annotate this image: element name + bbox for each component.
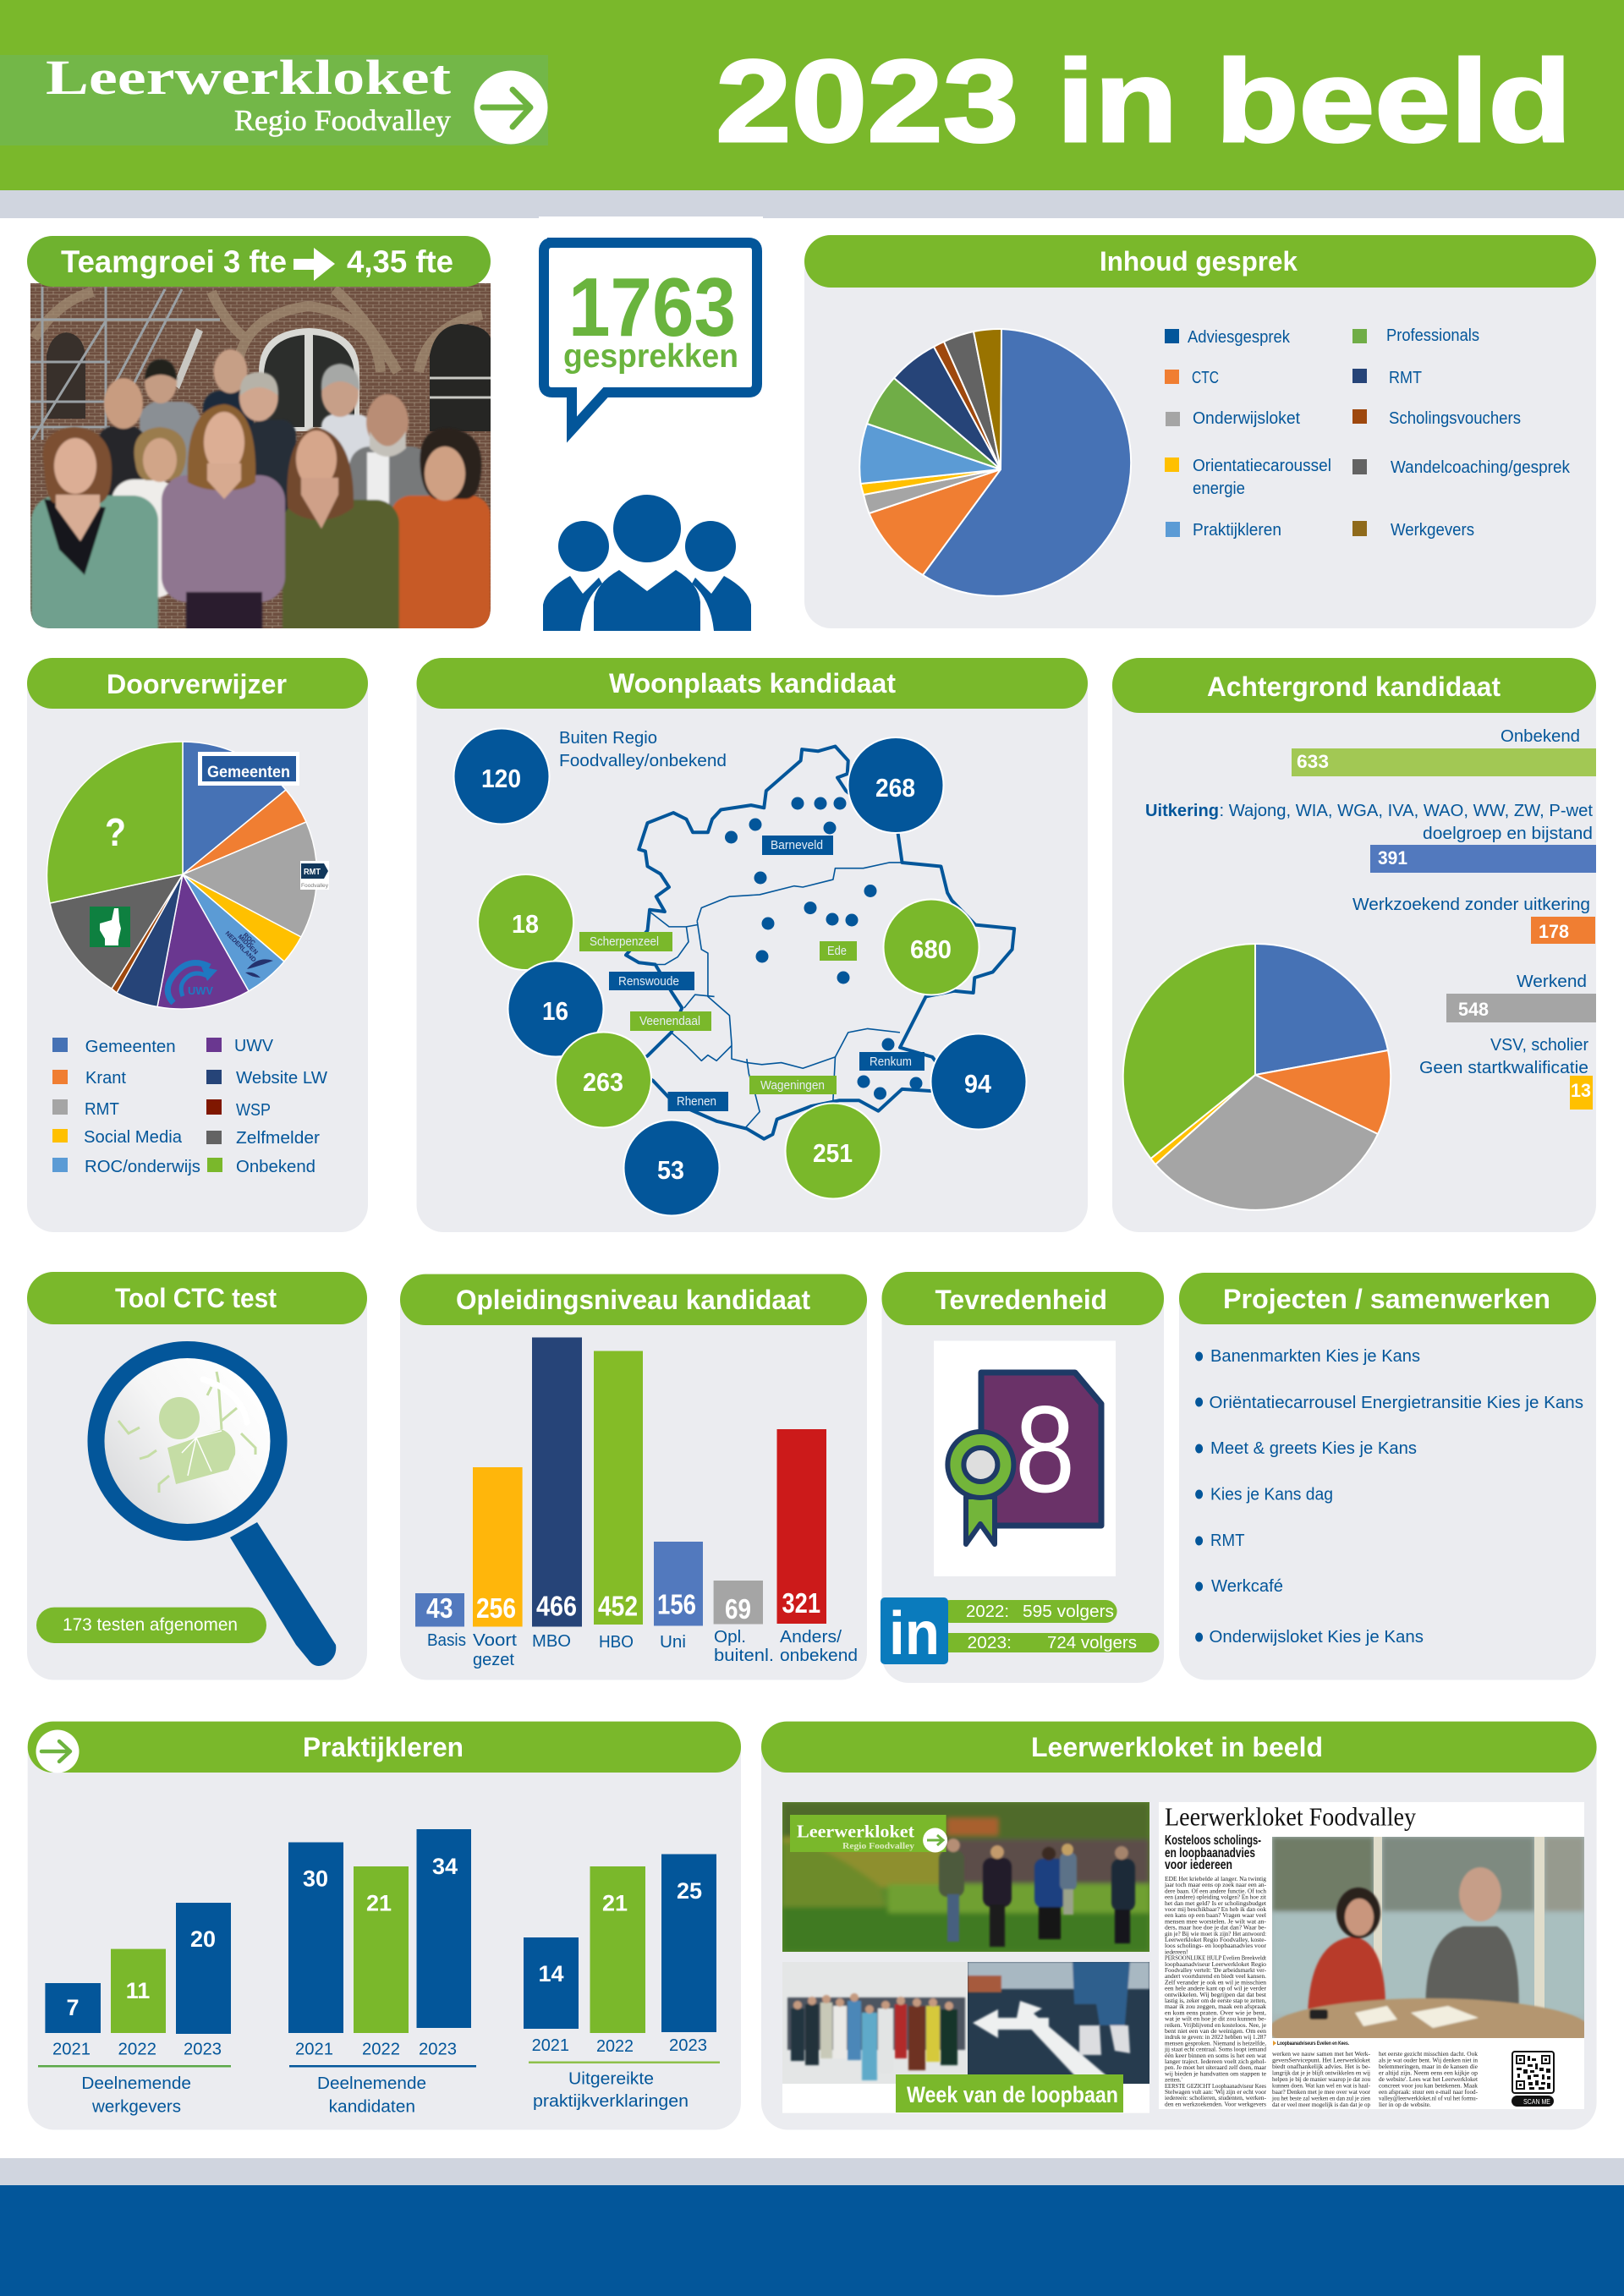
- article text column 1: maar ik zou zeggen, maak een afspraak: [1165, 2003, 1266, 2010]
- qr code: [1512, 2052, 1554, 2093]
- photo: beroepen groep: [782, 1962, 968, 2084]
- bubble values: 18: [512, 909, 539, 939]
- bar: werkend: 548: [1458, 999, 1489, 1020]
- article caption: Loopbaanadviseurs Evelien en Kees.: [1277, 2041, 1349, 2047]
- bar: onbekend: Onbekend: [1501, 727, 1580, 746]
- bar chart: deelnemende werkgevers: 2021: [52, 2041, 91, 2059]
- legend: doorverwijzer: ROC/onderwijs: [85, 1158, 200, 1176]
- bubble values: 53: [657, 1155, 684, 1185]
- heading: [1112, 658, 1596, 713]
- article text column 1: mensen gesproken. Niemand is hetzelfde,: [1165, 2039, 1266, 2047]
- article text column 1: Foodvalley vertelt: 'De arbeidsmarkt ver-: [1165, 1966, 1267, 1974]
- article subtitle: [1165, 1833, 1261, 1872]
- bar chart: deelnemende kandidaten: 2022: [362, 2041, 400, 2059]
- article text column 2: baar? Denken met je mee over wat voor: [1272, 2088, 1371, 2096]
- photo: groep in het veld: [782, 1802, 1149, 1952]
- place labels: Ede: [827, 944, 847, 958]
- pie label: Gemeenten: [198, 752, 299, 786]
- article text column 2: helpen je bij de manier waarop je dat zou: [1272, 2075, 1370, 2083]
- legend: inhoud gesprek: energie: [1193, 479, 1245, 498]
- bar chart: deelnemende kandidaten: 21: [366, 1891, 392, 1916]
- panel: projecten samenwerken: [1179, 1273, 1596, 1680]
- heading: Teamgroei: Teamgroei 3 fte: [61, 244, 287, 279]
- pie label: RMT logo: RMT: [304, 868, 321, 877]
- pie label: Gemeenten: Gemeenten: [207, 764, 290, 781]
- article text column 1: den en werkzoekenden. Voor werkgevers: [1165, 2100, 1266, 2107]
- article text column 1: een hele andere kant op of wil je verder: [1165, 1985, 1267, 1992]
- bar chart: opleidingsniveau: 256: [476, 1592, 516, 1624]
- article text column 1: reiken. Vrijblijvend en kosteloos. Nee, je: [1165, 2021, 1267, 2029]
- pie chart: inhoud gesprek: [859, 329, 1131, 596]
- article text column 1: loopbaanadviseur Leerwerkloket Regio: [1165, 1960, 1266, 1968]
- bubble values: 94: [964, 1069, 992, 1099]
- heading: [27, 1272, 367, 1324]
- article text column 1: mensen mee worstelen. Je wilt wat an-: [1165, 1917, 1267, 1925]
- front row: [112, 479, 178, 598]
- article text column 1: andert voortdurend en biedt veel kansen.: [1165, 1972, 1266, 1980]
- bullet list: Banenmarkten Kies je Kans: [1210, 1347, 1420, 1366]
- pill: 173 testen afgenomen: 173 testen afgenomen: [63, 1615, 238, 1635]
- article text column 3: de website'. Lees wat het Leerwerkloket: [1379, 2075, 1479, 2083]
- icon: rapportcijfer 8: 8: [1015, 1380, 1075, 1518]
- legend: inhoud gesprek: Adviesgesprek: [1188, 328, 1291, 347]
- pie chart: achtergrond: [1123, 944, 1391, 1210]
- article text column 2: geversServicepunt. Het Leerwerkloket: [1272, 2057, 1371, 2063]
- icon: hand: [90, 907, 130, 947]
- article text column 1: en kom eens praten. Over wie je bent,: [1165, 2008, 1266, 2016]
- bar chart: deelnemende werkgevers: 20: [190, 1926, 216, 1952]
- panel: tool ctc test: [27, 1272, 367, 1680]
- heading: Achtergrond kandidaat: [1207, 671, 1501, 702]
- legend: doorverwijzer: Social Media: [84, 1128, 183, 1147]
- bubble values: 268: [875, 773, 915, 803]
- scan me pill: SCAN ME: [1523, 2098, 1550, 2106]
- bar: uitkering: : Wajong, WIA, WGA, IVA, WAO, WW, ZW, P-wet: [1220, 802, 1593, 820]
- legend: inhoud gesprek: Orientatiecaroussel: [1193, 457, 1331, 475]
- icon: linkedin: in: [889, 1600, 940, 1668]
- bar chart: deelnemende kandidaten: 2021: [295, 2041, 333, 2059]
- logo overlay: Regio Foodvalley: [842, 1841, 915, 1851]
- icon: people: [543, 495, 751, 631]
- article text column 1: Zelf verander je ook en wil je misschien: [1165, 1978, 1266, 1986]
- bar chart: deelnemende werkgevers: werkgevers: [91, 2098, 181, 2117]
- legend: doorverwijzer: WSP: [236, 1101, 271, 1120]
- bullet list: Kies je Kans dag: [1210, 1486, 1333, 1504]
- bar chart: opleidingsniveau: Voort: [473, 1631, 517, 1650]
- pie chart: doorverwijzer: [47, 742, 317, 1009]
- bar: vsv scholier: Geen startkwalificatie: [1419, 1059, 1588, 1077]
- article text column 1: Leerwerkloket Regio Foodvalley, koste-: [1165, 1936, 1267, 1943]
- bar chart: deelnemende werkgevers: 11: [126, 1978, 150, 2003]
- heading: Praktijkleren: [303, 1732, 464, 1762]
- heading: [27, 658, 368, 709]
- article text column 2: [1271, 2050, 1371, 2108]
- bar chart: uitgereikte praktijkverklaringen: 21: [602, 1891, 628, 1916]
- article text column 1: voor mij beschikbaar? En heb ik dan ook: [1165, 1905, 1266, 1913]
- article text column 2: jou het beste zal werken en dan zul je zien: [1271, 2094, 1370, 2102]
- band under photos: [782, 2084, 1149, 2113]
- article subtitle: voor iedereen: [1165, 1858, 1232, 1872]
- article text column 1: lastig is, zeker om de eerste stap te zetten,: [1165, 1997, 1266, 2004]
- article text column 1: indruk te geven: in 2022 hebben wij 1.287: [1165, 2033, 1266, 2041]
- bar: uitkering: 391: [1378, 847, 1407, 869]
- panel: leerwerkloket in beeld: [761, 1722, 1597, 2129]
- heading: [881, 1272, 1164, 1325]
- article text column 3: belemmeringen, maar in de kansen die: [1379, 2063, 1479, 2070]
- note: buiten regio: Foodvalley/onbekend: [559, 752, 727, 770]
- article text column 1: EDE Het kriebelde al langer. Na twintig: [1165, 1875, 1266, 1882]
- article text column 1: het dan met geld? Is er scholingsbudget: [1165, 1899, 1267, 1907]
- label: Week van de loopbaan: Week van de loopbaan: [907, 2082, 1118, 2107]
- article text column 3: er altijd zijn. Neem eens een kijkje op: [1379, 2069, 1478, 2077]
- legend: doorverwijzer: Onbekend: [236, 1158, 315, 1176]
- legend: inhoud gesprek: Praktijkleren: [1193, 521, 1281, 540]
- logo: UWV: [167, 963, 217, 1003]
- icon: magnifier: [96, 1350, 336, 1666]
- article text column 1: een (andere) opleiding volgen? En hoe zit: [1165, 1893, 1267, 1901]
- bullet list: Oriëntatiecarrousel Energietransitie Kies je Kans: [1210, 1394, 1583, 1412]
- bar: vsv scholier: VSV, scholier: [1490, 1036, 1588, 1055]
- bar chart: uitgereikte praktijkverklaringen: praktijkverklaringen: [533, 2092, 689, 2111]
- bar chart: opleidingsniveau: HBO: [599, 1633, 634, 1652]
- article text column 1: EERSTE GEZICHT Loopbaanadviseur Kees: [1165, 2082, 1266, 2090]
- bubble values: 680: [910, 934, 952, 964]
- logo: ROC Midden Nederland: NEDERLAND: [224, 929, 258, 964]
- bar chart: uitgereikte praktijkverklaringen: 2022: [596, 2037, 634, 2056]
- bar chart: uitgereikte praktijkverklaringen: [524, 1854, 720, 2111]
- arrow: [294, 248, 335, 281]
- bar chart: deelnemende kandidaten: 34: [432, 1854, 458, 1879]
- heading: [28, 1722, 741, 1773]
- bar chart: opleidingsniveau: Uni: [660, 1633, 686, 1652]
- article text column 3: [1379, 2050, 1479, 2108]
- bar: uitkering: [1145, 802, 1596, 873]
- article text column 2: werken we nauw samen met het Werk-: [1272, 2050, 1371, 2058]
- heading: Leerwerkloket in beeld: [1031, 1732, 1323, 1762]
- map: regio foodvalley: [626, 746, 1014, 1139]
- bar: vsv scholier: [1419, 1036, 1593, 1110]
- logo: ROC Midden Nederland: ROC: [242, 931, 257, 947]
- bar chart: opleidingsniveau: buitenl.: [714, 1647, 774, 1665]
- bar chart: opleidingsniveau: 452: [598, 1590, 638, 1622]
- back row: [201, 389, 255, 428]
- label: Week van de loopbaan: [896, 2074, 1123, 2112]
- legend: inhoud gesprek: Wandelcoaching/gesprek: [1391, 458, 1571, 477]
- icon: rapportcijfer 8: [934, 1341, 1116, 1576]
- article text column 1: PERSOONLIJKE HULP Evelien Breekveldt: [1165, 1954, 1267, 1962]
- article text column 1: jij staat echt centraal. Soms loopt iemand: [1164, 2046, 1266, 2053]
- bar chart: opleidingsniveau: 69: [725, 1593, 751, 1625]
- article text column 1: dere baan. Of een andere functie. Of toch: [1165, 1887, 1266, 1894]
- bar chart: opleidingsniveau: 321: [782, 1587, 820, 1619]
- heading: [804, 235, 1596, 288]
- article text column 1: ders, maar hoe doe je dat dan? Waar be-: [1165, 1924, 1267, 1932]
- photo: wegwijzers: [968, 1962, 1149, 2084]
- bubble values: 16: [542, 996, 568, 1026]
- article text column 3: het eerste gezicht misschien dacht. Ook: [1379, 2050, 1478, 2058]
- bar chart: deelnemende werkgevers: [38, 1903, 231, 2117]
- bar chart: deelnemende werkgevers: 2023: [184, 2041, 222, 2059]
- place labels: Barneveld: [771, 838, 823, 852]
- newspaper article: [1159, 1802, 1590, 2109]
- bar: werkzoekend: Werkzoekend zonder uitkering: [1352, 896, 1590, 914]
- map dots: [725, 797, 922, 1099]
- bar chart: deelnemende kandidaten: kandidaten: [329, 2098, 415, 2117]
- callout: 1763 gesprekken: 1763: [568, 260, 736, 353]
- bar chart: deelnemende kandidaten: Deelnemende: [317, 2074, 426, 2093]
- note: buiten regio: [559, 729, 727, 770]
- scan me pill: [1512, 2096, 1554, 2107]
- bar: uitkering: Uitkering: [1145, 802, 1219, 820]
- place labels: Veenendaal: [639, 1014, 700, 1028]
- bar chart: deelnemende werkgevers: 2022: [118, 2041, 156, 2059]
- place labels: Wageningen: [760, 1078, 825, 1093]
- legend: inhoud gesprek: Professionals: [1386, 326, 1479, 345]
- panel: praktijkleren: [28, 1722, 741, 2129]
- bubble values: 251: [813, 1138, 853, 1168]
- article text column 3: lier in op de website.: [1379, 2101, 1431, 2108]
- bubble values: 120: [481, 764, 521, 793]
- bar chart: opleidingsniveau: Opl.: [714, 1628, 746, 1647]
- bar chart: opleidingsniveau: 156: [657, 1589, 696, 1620]
- bullet list: Onderwijsloket Kies je Kans: [1210, 1628, 1424, 1647]
- article text column 1: jaar toch maar eens op zoek naar een an-: [1164, 1881, 1267, 1888]
- article text column 3: concreet voor jou kan betekenen. Maak: [1379, 2082, 1478, 2089]
- article text column 3: een afspraak: stuur een e-mail naar food-: [1379, 2088, 1479, 2096]
- callout: 1763 gesprekken: gesprekken: [563, 338, 738, 375]
- bar: werkzoekend: [1352, 896, 1595, 944]
- article text column 1: bent niet een van de weinigen. Om een: [1165, 2027, 1266, 2035]
- legend: doorverwijzer: Zelfmelder: [236, 1129, 320, 1148]
- article text column 1: loos scholings- en loopbaanadvies voor: [1165, 1942, 1267, 1949]
- bar: werkend: [1446, 973, 1596, 1022]
- heading: [761, 1722, 1597, 1773]
- legend: doorverwijzer: Krant: [85, 1069, 126, 1088]
- article text column 1: iedereen: scholieren, studenten, werken-: [1165, 2094, 1267, 2101]
- bubbles: aantallen per gemeente: [453, 729, 1027, 1216]
- linkedin volgers: 595 volgers: [1023, 1603, 1114, 1621]
- bullet list: RMT: [1210, 1532, 1245, 1550]
- team photo: [30, 283, 491, 660]
- legend: inhoud gesprek: Onderwijsloket: [1193, 409, 1300, 428]
- legend: doorverwijzer: UWV: [234, 1037, 274, 1055]
- panel: tevredenheid: [881, 1272, 1164, 1683]
- pill: 173 testen afgenomen: [36, 1608, 266, 1643]
- bar: onbekend: 633: [1297, 751, 1329, 772]
- bullet list: Werkcafé: [1211, 1577, 1283, 1596]
- bullet list: [1195, 1347, 1583, 1647]
- bar: uitkering: doelgroep en bijstand: [1423, 825, 1593, 843]
- bar: vsv scholier: 13: [1571, 1080, 1591, 1101]
- panel: achtergrond kandidaat: [1112, 658, 1596, 1232]
- article text column 2: kunnen doen. Wat kan wel en wat is haal-: [1272, 2082, 1371, 2089]
- footer band: [0, 2158, 1624, 2296]
- bar chart: deelnemende werkgevers: Deelnemende: [81, 2074, 191, 2093]
- bar chart: uitgereikte praktijkverklaringen: 25: [677, 1878, 702, 1904]
- place labels: Rhenen: [677, 1094, 716, 1109]
- article text column 1: een kans op een baan? Vragen waar veel: [1165, 1911, 1266, 1919]
- bar chart: uitgereikte praktijkverklaringen: 2021: [532, 2036, 569, 2055]
- place labels: Renswoude: [618, 974, 679, 989]
- bubble values: 263: [583, 1067, 623, 1097]
- bullet list: Meet & greets Kies je Kans: [1210, 1439, 1417, 1458]
- article text column 1: één keer binnen en soms is het een wat: [1165, 2052, 1267, 2059]
- bubble values: [481, 764, 992, 1185]
- bar chart: opleidingsniveau: onbekend: [780, 1647, 858, 1665]
- bar chart: opleidingsniveau: gezet: [473, 1651, 514, 1669]
- bar: onbekend: [1292, 727, 1596, 776]
- article text column 1: wat je wilt en hoe je dit zou kunnen be-: [1165, 2015, 1267, 2023]
- linkedin volgers: 724 volgers: [1047, 1634, 1137, 1652]
- heading: [1179, 1273, 1596, 1324]
- legend: inhoud gesprek: RMT: [1389, 369, 1422, 387]
- legend: doorverwijzer: Gemeenten: [85, 1038, 176, 1056]
- article subtitle: Kosteloos scholings-: [1165, 1833, 1261, 1848]
- article text column 1: [1164, 1875, 1267, 2107]
- legend: inhoud gesprek: Werkgevers: [1391, 521, 1474, 540]
- linkedin volgers: [881, 1597, 1159, 1668]
- bar chart: opleidingsniveau: MBO: [532, 1632, 571, 1651]
- heading: Tool CTC test: [115, 1283, 277, 1313]
- bar chart: deelnemende kandidaten: 30: [303, 1866, 328, 1892]
- bar chart: opleidingsniveau: Anders/: [780, 1628, 842, 1647]
- heading: Doorverwijzer: [107, 669, 287, 699]
- heading: [416, 658, 1088, 709]
- logo: Leerwerkloket Regio Foodvalley: Leerwerkloket: [46, 50, 452, 105]
- logo: Leerwerkloket Regio Foodvalley: [0, 50, 548, 145]
- heading: Projecten / samenwerken: [1223, 1284, 1550, 1314]
- panel: opleidingsniveau kandidaat: [400, 1274, 867, 1680]
- bar: werkend: Werkend: [1517, 973, 1587, 991]
- panel: woonplaats kandidaat: [416, 658, 1088, 1232]
- heading: Woonplaats kandidaat: [609, 668, 896, 699]
- article text column 1: Stelwagen vult aan: 'Wij zijn er echt voor: [1165, 2088, 1267, 2096]
- legend: doorverwijzer: RMT: [85, 1100, 119, 1119]
- article subtitle: en loopbaanadvies: [1165, 1846, 1255, 1860]
- article text column 1: wij bieden je handvatten om stappen te: [1165, 2069, 1267, 2077]
- heading: [400, 1274, 867, 1325]
- bar chart: opleidingsniveau: Basis: [427, 1631, 466, 1650]
- logo overlay: Leerwerkloket: [797, 1822, 914, 1842]
- article text column 3: valley@leerwerkloket.nl of vul het formu-: [1379, 2094, 1478, 2102]
- heading: Inhoud gesprek: [1100, 246, 1298, 277]
- place labels: Renkum: [870, 1055, 912, 1069]
- heading: Tevredenheid: [935, 1285, 1107, 1315]
- pie label: RMT logo: [300, 861, 329, 890]
- heading: Opleidingsniveau kandidaat: [456, 1285, 810, 1315]
- article text column 2: biedt onafhankelijk advies. Het is be-: [1272, 2063, 1371, 2070]
- panel: doorverwijzer: [27, 658, 368, 1232]
- linkedin volgers: 2022:: [966, 1603, 1009, 1621]
- article text column 1: zetten.': [1165, 2076, 1182, 2084]
- legend: inhoud gesprek: [1165, 326, 1571, 540]
- bar chart: opleidingsniveau: [415, 1338, 858, 1669]
- article text column 1: iedereen!: [1165, 1948, 1188, 1955]
- bar: werkzoekend: 178: [1539, 921, 1569, 942]
- legend: inhoud gesprek: CTC: [1192, 369, 1219, 387]
- article text column 1: ontwikkelen. Wij begrijpen dat dat best: [1165, 1991, 1267, 1998]
- place labels: Scherpenzeel: [590, 934, 659, 949]
- article text column 2: langrijk dat je je blijft ontwikkelen en wij: [1272, 2069, 1370, 2077]
- bar chart: opleidingsniveau: 466: [536, 1590, 577, 1622]
- legend: inhoud gesprek: Scholingsvouchers: [1389, 409, 1521, 428]
- article photo: [1272, 1837, 1584, 2038]
- legend: doorverwijzer: Website LW: [236, 1069, 327, 1088]
- article text column 3: als je wat ouder bent. Wij denken niet in: [1379, 2057, 1478, 2063]
- bar chart: uitgereikte praktijkverklaringen: Uitgereikte: [568, 2069, 654, 2088]
- legend: doorverwijzer: [52, 1037, 327, 1176]
- icon: arrow circle: [36, 1730, 80, 1773]
- logo: ROC Midden Nederland: MIDDEN: [237, 933, 260, 956]
- article text column 1: pen. Je moet het uiteraard zelf doen, maar: [1165, 2063, 1267, 2071]
- callout: 1763 gesprekken: [539, 216, 763, 430]
- place labels: [579, 836, 924, 1111]
- linkedin volgers: 2023:: [968, 1634, 1012, 1652]
- logo: ROC Midden Nederland: [224, 929, 273, 978]
- bar chart: deelnemende kandidaten: [288, 1829, 476, 2117]
- article title: Leerwerkloket Foodvalley: [1165, 1802, 1416, 1832]
- pie label: question mark: ?: [105, 810, 126, 854]
- pie label: RMT logo: Foodvalley: [301, 884, 328, 889]
- bar chart: deelnemende kandidaten: 2023: [419, 2041, 457, 2059]
- bar chart: opleidingsniveau: 43: [426, 1592, 453, 1624]
- header band: [0, 0, 1624, 218]
- heading: Teamgroei: 4,35 fte: [347, 244, 453, 279]
- heading: Teamgroei: [27, 236, 491, 287]
- article text column 2: dat er veel meer mogelijk is dan dat je op: [1272, 2101, 1370, 2108]
- article text column 1: langer traject. Iedereen voelt zich gehol-: [1165, 2058, 1267, 2065]
- note: buiten regio: Buiten Regio: [559, 729, 657, 748]
- article text column 1: gin je? Bij wie moet ik zijn? Het antwoord:: [1165, 1930, 1266, 1937]
- title: 2023 in beeld: 2023 in beeld: [716, 36, 1572, 167]
- bar chart: deelnemende werkgevers: 7: [66, 1995, 80, 2020]
- bar chart: uitgereikte praktijkverklaringen: 14: [538, 1961, 564, 1986]
- logo: UWV: UWV: [188, 984, 213, 997]
- panel: teamgroei: [27, 236, 491, 660]
- logo: Leerwerkloket Regio Foodvalley: Regio Foodvalley: [234, 104, 452, 137]
- bar chart: uitgereikte praktijkverklaringen: 2023: [669, 2036, 707, 2055]
- panel: inhoud gesprek: [804, 235, 1596, 628]
- logo overlay: [790, 1815, 947, 1852]
